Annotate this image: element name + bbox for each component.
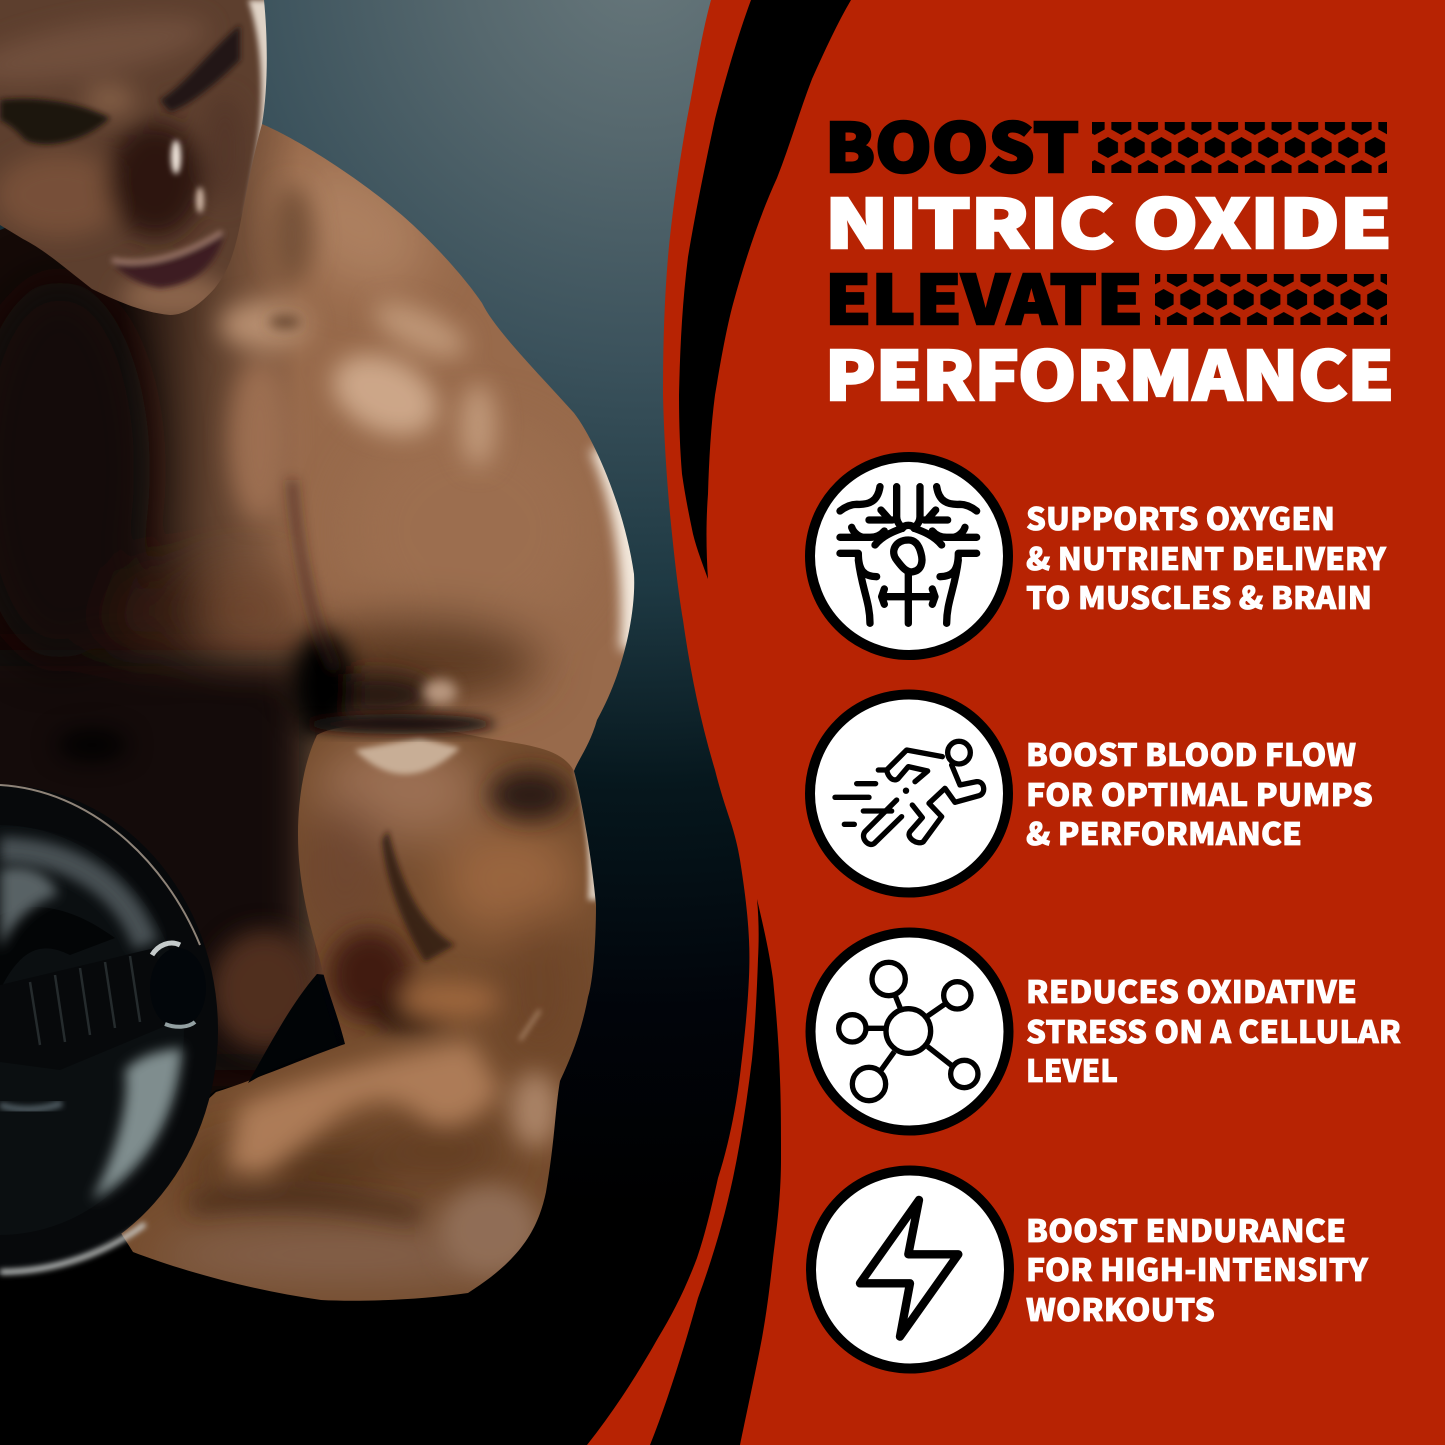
- benefit 1: oxygen delivery: [810, 457, 1387, 655]
- heading: NITRIC OXIDE: NITRIC OXIDE: [825, 171, 1392, 268]
- head: [0, 0, 280, 330]
- benefit 4 text: BOOST ENDURANCE: [1026, 1206, 1346, 1251]
- black swoosh: lower: [650, 899, 781, 1445]
- heading: BOOST: BOOST: [825, 95, 1079, 192]
- threaded bar end: [0, 948, 175, 1070]
- black swoosh: upper: [679, 0, 851, 579]
- heading: ELEVATE: ELEVATE: [825, 247, 1143, 344]
- benefit 2 text: & PERFORMANCE: [1026, 809, 1302, 854]
- title: [830, 120, 1391, 402]
- torso and shoulder: [0, 124, 634, 1094]
- hexagon pattern strip: [1092, 122, 1387, 173]
- bicep and forearm: [121, 727, 596, 1301]
- benefit 4 text: [1026, 1206, 1369, 1330]
- icon: lightning bolt: [811, 1170, 1009, 1368]
- benefit 4 text: FOR HIGH-INTENSITY: [1026, 1245, 1369, 1290]
- benefit 4: endurance: [811, 1170, 1369, 1368]
- photo: muscular man curling a dumbbell: [0, 0, 800, 1445]
- benefit 3: oxidative stress: [810, 932, 1401, 1130]
- benefit 2 text: BOOST BLOOD FLOW: [1026, 730, 1356, 775]
- icon: circulatory system: [810, 457, 1008, 655]
- dumbbell plate: [0, 785, 218, 1275]
- dark shadow under the deltoid: [305, 714, 495, 734]
- benefit 3 text: STRESS ON A CELLULAR: [1026, 1007, 1401, 1052]
- benefit 1 text: SUPPORTS OXYGEN: [1026, 494, 1335, 539]
- icon: molecule network: [810, 932, 1008, 1130]
- benefit 1 text: [1026, 494, 1387, 618]
- benefit 3 text: REDUCES OXIDATIVE: [1026, 967, 1357, 1012]
- heading: PERFORMANCE: PERFORMANCE: [825, 323, 1394, 420]
- icon: running figure: [810, 694, 1008, 892]
- benefit 1 text: TO MUSCLES & BRAIN: [1026, 573, 1372, 618]
- benefit 3 text: [1026, 967, 1401, 1091]
- hexagon pattern strip: [1155, 274, 1387, 325]
- dark gap between torso and forearm: [248, 974, 338, 1083]
- benefit 2: blood flow: [810, 694, 1373, 892]
- benefit 2 text: FOR OPTIMAL PUMPS: [1026, 770, 1373, 815]
- benefit 4 text: WORKOUTS: [1026, 1285, 1215, 1330]
- benefit 3 text: LEVEL: [1026, 1046, 1118, 1091]
- benefit 2 text: [1026, 730, 1373, 854]
- benefit 1 text: & NUTRIENT DELIVERY: [1026, 534, 1387, 579]
- red swoosh panel: [587, 0, 1445, 1445]
